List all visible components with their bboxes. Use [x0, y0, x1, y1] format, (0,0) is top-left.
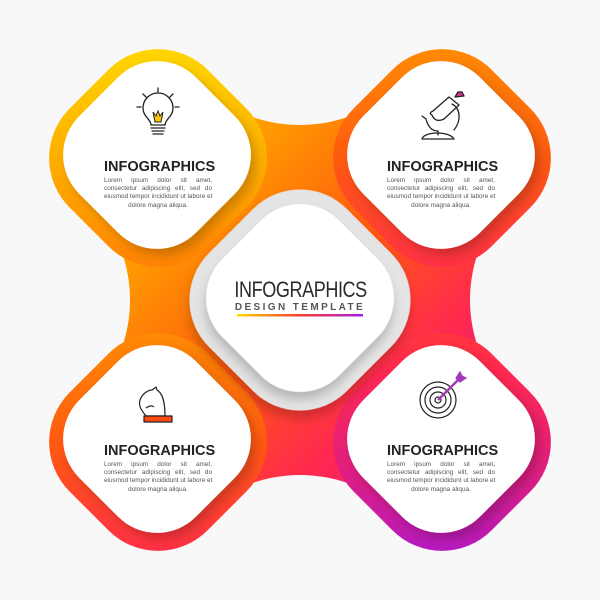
card text: bottom-right: dolore magna aliqua.: [411, 486, 471, 493]
center title: DESIGN TEMPLATE: [235, 302, 365, 313]
center title: [234, 277, 367, 313]
card text: top-left: [104, 159, 215, 209]
card text: top-right: [387, 159, 498, 209]
card text: bottom-right: [387, 443, 498, 493]
card text: bottom-left: Lorem ipsum dolor sit amet,: [104, 461, 212, 468]
icon: target: [420, 372, 466, 418]
card text: top-left: INFOGRAPHICS: [104, 159, 215, 175]
card text: bottom-left: consectetur adipiscing elit, sed do: [104, 469, 212, 476]
center underline: [237, 314, 363, 316]
card text: bottom-right: eiusmod tempor incididunt ut labore et: [387, 477, 495, 484]
card text: bottom-left: [104, 443, 215, 493]
card text: top-right: Lorem ipsum dolor sit amet,: [387, 177, 495, 184]
icon: light bulb: [137, 88, 179, 134]
card text: bottom-right: INFOGRAPHICS: [387, 443, 498, 459]
card text: top-left: consectetur adipiscing elit, sed do: [104, 185, 212, 192]
card text: top-right: dolore magna aliqua.: [411, 202, 471, 209]
card text: bottom-right: Lorem ipsum dolor sit amet,: [387, 461, 495, 468]
icon: microscope: [422, 92, 464, 139]
card text: bottom-right: consectetur adipiscing elit, sed do: [387, 469, 495, 476]
card text: top-right: eiusmod tempor incididunt ut labore et: [387, 193, 495, 200]
card text: bottom-left: eiusmod tempor incididunt ut labore et: [104, 477, 212, 484]
icon: chess knight: [139, 387, 172, 422]
card text: top-right: INFOGRAPHICS: [387, 159, 498, 175]
center ring: [162, 162, 438, 438]
card text: top-left: dolore magna aliqua.: [128, 202, 188, 209]
center title: INFOGRAPHICS: [234, 277, 367, 302]
card text: top-left: eiusmod tempor incididunt ut labore et: [104, 193, 212, 200]
card text: bottom-left: dolore magna aliqua.: [128, 486, 188, 493]
white card faces: [40, 38, 558, 556]
card text: top-right: consectetur adipiscing elit, sed do: [387, 185, 495, 192]
card text: bottom-left: INFOGRAPHICS: [104, 443, 215, 459]
card text: top-left: Lorem ipsum dolor sit amet,: [104, 177, 212, 184]
